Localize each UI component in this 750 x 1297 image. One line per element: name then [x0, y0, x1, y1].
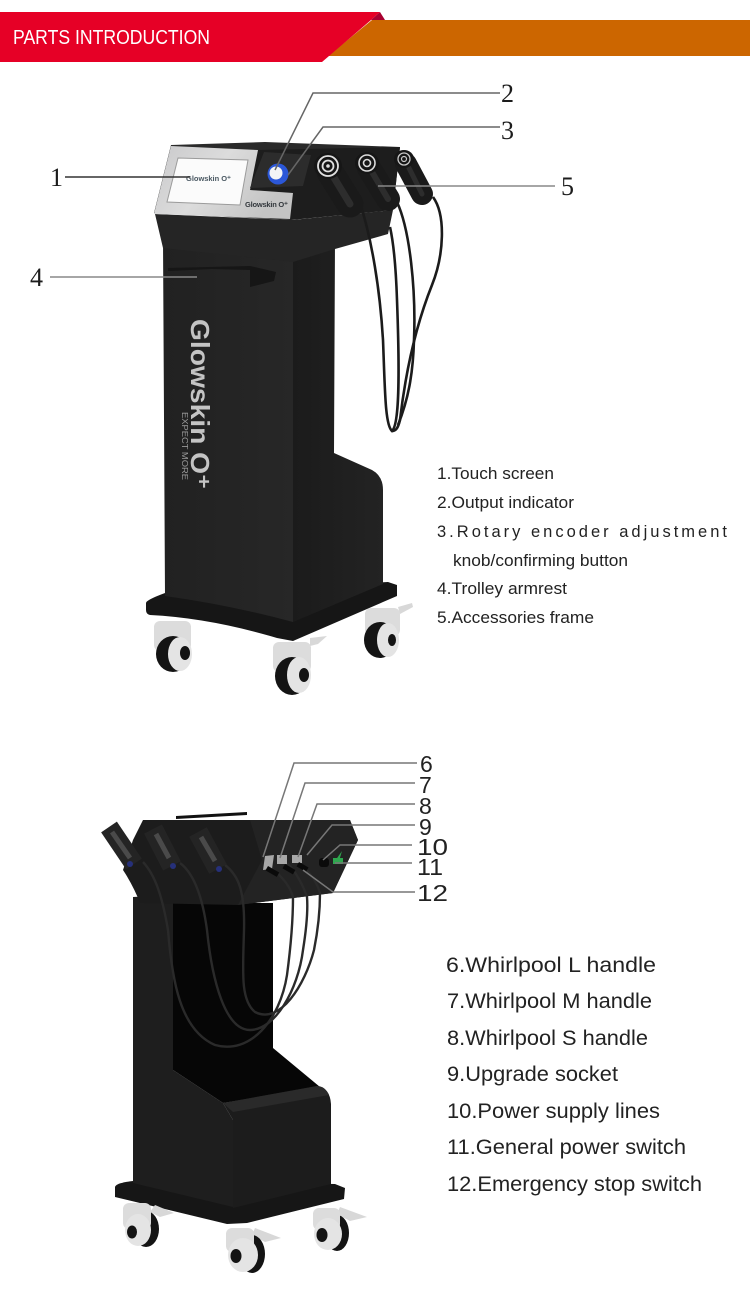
- handle 2: [355, 152, 388, 199]
- shoulder: [155, 210, 393, 262]
- column brand: EXPECT MORE: [180, 412, 189, 480]
- callout 8: [298, 793, 432, 857]
- rotary knob: [250, 152, 311, 188]
- red tab: [0, 12, 380, 62]
- parts list bottom: 12.Emergency stop switch: [447, 1172, 702, 1196]
- control head top: [154, 142, 400, 220]
- box front: [223, 1086, 331, 1208]
- front caster: [226, 1228, 281, 1273]
- callouts top: [30, 79, 574, 292]
- callouts bottom: [263, 751, 448, 906]
- parts list bottom: 11.General power switch: [447, 1135, 686, 1159]
- parts list bottom: 6.Whirlpool L handle: [446, 953, 656, 977]
- column side: [293, 225, 383, 622]
- callout 1: 1: [50, 163, 63, 192]
- lower base: [146, 582, 397, 641]
- callout 9: [307, 814, 432, 855]
- callout 11: 11: [417, 854, 443, 880]
- machine front view: [146, 142, 442, 695]
- handle 3: [394, 150, 422, 194]
- cables: [143, 862, 320, 1047]
- left caster: [154, 621, 192, 672]
- silver panel: [154, 146, 293, 219]
- front caster: [273, 636, 327, 695]
- handle 1: [314, 153, 350, 204]
- header banner: [0, 12, 750, 62]
- parts list bottom: 7.Whirlpool M handle: [447, 989, 652, 1013]
- callout 10: 10: [417, 834, 448, 860]
- parts list bottom: 10.Power supply lines: [447, 1099, 660, 1123]
- parts list top: [437, 465, 727, 627]
- callout 7: 7: [419, 772, 432, 798]
- callout 9: 9: [419, 814, 432, 840]
- callout 3: 3: [501, 116, 514, 145]
- heading: PARTS INTRODUCTION: [13, 27, 210, 49]
- callout 4: 4: [30, 263, 43, 292]
- parts list top: 3.Rotary encoder adjustment: [437, 523, 727, 541]
- machine rear view: [109, 812, 367, 1273]
- parts list top: knob/confirming button: [453, 552, 628, 570]
- handle 3: [198, 832, 222, 872]
- parts list top: 1.Touch screen: [437, 465, 554, 483]
- callout 7: [280, 772, 432, 858]
- callout 2: [275, 79, 514, 170]
- head: [123, 820, 358, 905]
- handle 2: [153, 829, 176, 869]
- callout 1: [50, 163, 190, 192]
- parts list top: 2.Output indicator: [437, 494, 575, 512]
- column front: [163, 240, 293, 622]
- top white strip marker: [176, 812, 247, 819]
- left caster: [123, 1203, 174, 1247]
- trolley armrest: [168, 266, 276, 287]
- callout 11: [335, 854, 443, 880]
- callout 6: [263, 751, 433, 857]
- callout 6: 6: [420, 751, 433, 777]
- column brand: Glowskin O⁺: [185, 319, 215, 489]
- parts list top: 5.Accessories frame: [437, 609, 594, 627]
- callout 8: 8: [419, 793, 432, 819]
- parts list bottom: 9.Upgrade socket: [447, 1062, 618, 1086]
- recess: [173, 903, 320, 1103]
- ports: [263, 851, 343, 877]
- dark fold: [371, 12, 385, 20]
- touch screen: [167, 158, 248, 205]
- callout 12: [303, 870, 448, 906]
- panel logo: Glowskin O⁺: [245, 200, 288, 209]
- callout 2: 2: [501, 79, 514, 108]
- callout 5: 5: [561, 172, 574, 201]
- parts list bottom: 8.Whirlpool S handle: [447, 1026, 648, 1050]
- callout 12: 12: [417, 880, 448, 906]
- touch screen: Glowskin O⁺: [186, 174, 231, 183]
- column: [133, 895, 233, 1207]
- rear caster: [313, 1207, 367, 1251]
- rear caster: [364, 603, 413, 658]
- parts list top: 4.Trolley armrest: [437, 580, 567, 598]
- lower base: [115, 1181, 345, 1224]
- parts list bottom: [446, 953, 702, 1196]
- head right face: [238, 820, 358, 905]
- cables: [360, 197, 442, 431]
- callout 3: [288, 116, 514, 175]
- head right face: [250, 147, 400, 220]
- orange band: [328, 20, 750, 56]
- callout 10: [323, 834, 448, 860]
- handle 1: [109, 827, 134, 867]
- box lip: [223, 1086, 329, 1112]
